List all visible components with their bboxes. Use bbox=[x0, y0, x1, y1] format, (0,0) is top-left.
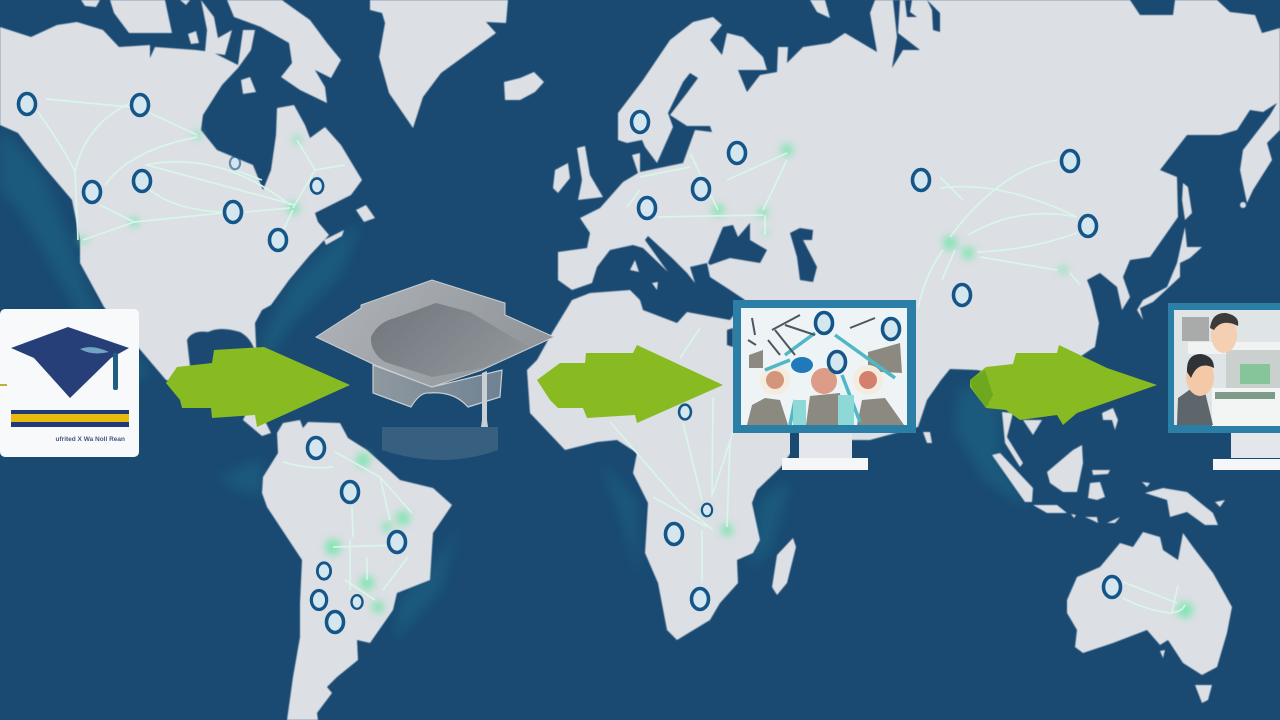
sea: Caspian Sea bbox=[790, 228, 817, 282]
land: Sri Lanka bbox=[923, 432, 932, 443]
monitor stand shadow bbox=[790, 433, 799, 458]
icon: large translucent graduation cap bbox=[316, 280, 554, 460]
cap shadow bbox=[382, 427, 498, 460]
land: Kuril island bbox=[1240, 202, 1246, 208]
icon: navy mortarboard bbox=[11, 327, 129, 398]
sea: Gulf of Mexico bbox=[187, 329, 257, 366]
screen pins bbox=[816, 312, 832, 334]
sea: Black Sea bbox=[708, 223, 767, 265]
monitor stand bbox=[799, 433, 852, 458]
monitor stand bbox=[1231, 433, 1280, 458]
land: Japan and Sakhalin bbox=[1137, 183, 1202, 320]
land: Novaya Zemlya bbox=[810, 0, 830, 18]
monitor: people screen bbox=[1168, 303, 1280, 470]
network: green glowing hubs bbox=[79, 131, 1193, 618]
land: Eurasia and Africa bbox=[527, 0, 1280, 640]
land: Tasmania bbox=[1160, 650, 1212, 703]
coastal shelf shading bbox=[0, 128, 1030, 640]
small caption: ufrited X Wa Noll Rean bbox=[56, 436, 125, 443]
arrow: green middle bbox=[537, 345, 723, 423]
monitor screen bbox=[741, 308, 907, 425]
screen person back bbox=[1210, 313, 1238, 353]
land: Iceland bbox=[504, 72, 544, 100]
land: Madagascar bbox=[772, 538, 796, 595]
cap top inner panel bbox=[371, 303, 529, 377]
screen figures bbox=[747, 315, 904, 425]
land: New Guinea bbox=[1142, 482, 1225, 525]
sea: Red Sea bbox=[727, 328, 733, 347]
land: Newfoundland and Nova Scotia bbox=[324, 205, 375, 245]
land: North America bbox=[0, 22, 362, 436]
land: British Isles bbox=[553, 146, 603, 200]
monitor screen bbox=[1174, 310, 1280, 425]
cap tassel bbox=[481, 371, 488, 427]
network: connection lines bbox=[38, 99, 1185, 613]
monitor: classroom screen bbox=[733, 300, 916, 470]
land: Mediterranean islands bbox=[630, 260, 658, 290]
monitor frame bbox=[1168, 303, 1280, 433]
color stripes bbox=[11, 410, 129, 427]
screen equipment bbox=[1182, 317, 1280, 426]
land: Southeast Asia bbox=[992, 408, 1120, 523]
screen person front bbox=[1177, 354, 1214, 425]
monitor frame bbox=[733, 300, 916, 433]
arrow: green right bbox=[970, 345, 1157, 425]
land: Australia bbox=[1067, 532, 1232, 675]
network: location markers bbox=[18, 94, 1120, 632]
land: Greenland bbox=[370, 0, 508, 128]
cap top board bbox=[316, 280, 554, 387]
land: South America bbox=[262, 420, 452, 720]
land: Borneo bbox=[1047, 445, 1083, 492]
inland seas and gulfs bbox=[187, 0, 940, 366]
land: Arctic islands bbox=[81, 0, 341, 103]
cap base bbox=[373, 365, 502, 407]
sea: Siberian gulfs bbox=[892, 0, 940, 68]
arrow: green left bbox=[166, 347, 350, 427]
card: graduation cap diploma bbox=[0, 309, 139, 457]
small yellow dash bbox=[0, 384, 7, 386]
